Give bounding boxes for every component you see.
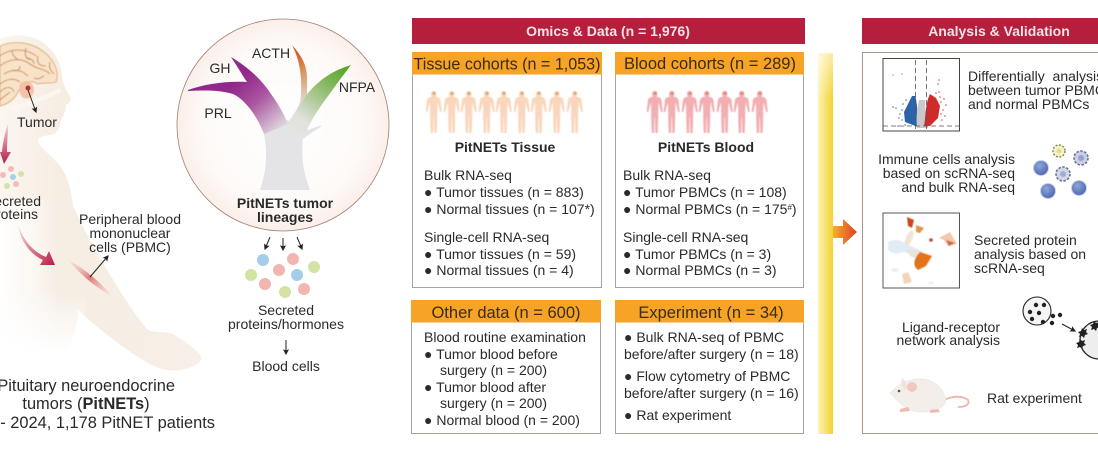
icon: ligand-receptor <box>1023 297 1098 359</box>
arrow to blood cells <box>285 340 287 354</box>
secreted proteins/hormones label: Secreted <box>258 302 314 318</box>
experiment list: before/after surgery (n = 18) <box>624 346 799 362</box>
experiment list: ● Bulk RNA-seq of PBMC <box>624 329 784 345</box>
ligand-receptor description: Ligand-receptor <box>902 319 1000 335</box>
blood cells label: Blood cells <box>252 358 320 374</box>
secreted protein description: scRNA-seq <box>974 260 1045 276</box>
panel: other data <box>411 300 601 434</box>
PBMC label <box>79 211 181 255</box>
header: analysis and validation <box>862 18 1098 44</box>
lineage labels <box>204 45 376 121</box>
arrow: tumor to secreted proteins <box>0 124 11 164</box>
secreted proteins label <box>0 193 41 222</box>
cohort title: - 2024, 1,178 PitNET patients <box>0 414 215 432</box>
blood bulk list: ) <box>792 201 797 217</box>
experiment list <box>624 329 799 423</box>
panel: blood cohorts <box>615 52 804 288</box>
blood subtitle: PitNETs Blood <box>658 139 754 155</box>
PBMC blood vessel <box>68 260 112 296</box>
immune cells description <box>878 151 1015 195</box>
panel: analysis and validation <box>862 52 1098 434</box>
tissue bulk list: Bulk RNA-seq <box>424 167 512 183</box>
immune cells description: Immune cells analysis <box>878 151 1015 167</box>
circle caption: lineages <box>257 209 313 225</box>
blood people icons <box>647 91 768 133</box>
other data list: surgery (n = 200) <box>440 362 547 378</box>
blood single-cell list <box>623 229 777 278</box>
volcano description <box>968 68 1098 112</box>
secreted protein dots <box>245 253 320 298</box>
other data list: surgery (n = 200) <box>440 395 547 411</box>
white band under brain <box>10 88 61 111</box>
yellow bar <box>818 53 833 434</box>
human silhouette with brain and tumor <box>0 36 202 371</box>
blood single-cell list: Single-cell RNA-seq <box>623 229 748 245</box>
volcano description: and normal PBMCs <box>968 96 1089 112</box>
icon: rat <box>890 378 969 413</box>
tumor label: Tumor <box>17 114 57 130</box>
tissue single-cell list: ● Tumor tissues (n = 59) <box>424 246 576 262</box>
volcano plot <box>883 58 960 131</box>
blood bulk list <box>623 167 797 217</box>
tissue bulk list: ● Tumor tissues (n = 883) <box>424 184 584 200</box>
other data list: ● Tumor blood before <box>424 346 558 362</box>
immune cells description: based on scRNA-seq <box>883 165 1015 181</box>
blood bulk list: ● Normal PBMCs (n = 175 <box>623 201 787 217</box>
brain <box>0 43 57 106</box>
panel: experiment <box>615 300 804 434</box>
tissue single-cell list: ● Normal tissues (n = 4) <box>424 262 574 278</box>
PBMC label: Peripheral blood <box>79 211 181 227</box>
lineage tree trunk <box>260 120 322 190</box>
other data heading: Other data (n = 600) <box>431 304 581 322</box>
circle caption <box>237 195 334 225</box>
tissue people icons <box>426 91 583 133</box>
tissue subtitle: PitNETs Tissue <box>455 139 556 155</box>
blood bulk list: # <box>787 203 792 212</box>
lineage labels: GH <box>210 60 230 76</box>
arrow: data to analysis <box>833 219 857 245</box>
circle caption: PitNETs tumor <box>237 195 334 211</box>
tissue single-cell list: Single-cell RNA-seq <box>424 229 549 245</box>
blood heading: Blood cohorts (n = 289) <box>624 55 796 73</box>
tumor arrow <box>28 90 36 112</box>
icon: immune cells <box>1034 145 1088 198</box>
PBMC label: cells (PBMC) <box>89 239 171 255</box>
secreted protein description: analysis based on <box>974 246 1086 262</box>
PBMC arrow <box>90 256 108 277</box>
header: analysis and validation: Analysis & Validation <box>928 23 1070 39</box>
secreted protein description <box>974 232 1086 276</box>
secreted proteins/hormones label: proteins/hormones <box>228 316 344 332</box>
ligand-receptor description <box>896 319 1000 348</box>
immune cells description: and bulk RNA-seq <box>901 179 1015 195</box>
cohort title <box>0 377 215 432</box>
PRL and GH branch <box>188 57 288 134</box>
blood single-cell list: ● Tumor PBMCs (n = 3) <box>623 246 771 262</box>
other data list: ● Normal blood (n = 200) <box>424 412 580 428</box>
header: omics and data <box>412 18 805 44</box>
other data list: ● Tumor blood after <box>424 379 546 395</box>
cohort title: Pituitary neuroendocrine <box>0 377 175 395</box>
panel: tissue cohorts <box>412 52 602 288</box>
secreted protein UMAP <box>883 213 960 288</box>
blood bulk list: Bulk RNA-seq <box>623 167 711 183</box>
fade of lower torso <box>0 290 85 352</box>
arrow: proteins to blood <box>18 225 55 265</box>
experiment list: ● Rat experiment <box>624 407 731 423</box>
body silhouette <box>0 36 202 371</box>
lineage labels: NFPA <box>339 79 376 95</box>
tissue heading: Tissue cohorts (n = 1,053) <box>414 56 600 74</box>
lineage labels: ACTH <box>252 45 290 61</box>
tissue single-cell list <box>424 229 576 278</box>
ligand-receptor description: network analysis <box>896 332 1000 348</box>
rat description: Rat experiment <box>987 390 1082 406</box>
ACTH branch <box>287 45 307 124</box>
tissue bulk list <box>424 167 595 217</box>
other data list: Blood routine examination <box>424 329 586 345</box>
blood single-cell list: ● Normal PBMCs (n = 3) <box>623 262 777 278</box>
secreted proteins/hormones label <box>228 302 344 332</box>
blood bulk list: ● Tumor PBMCs (n = 108) <box>623 184 787 200</box>
tumor dot <box>26 86 30 90</box>
NFPA branch <box>287 65 351 134</box>
fade of left torso <box>0 200 60 352</box>
PBMC label: mononuclear <box>90 225 171 241</box>
experiment list: ● Flow cytometry of PBMC <box>624 368 790 384</box>
arrows from circle <box>265 237 302 250</box>
circle: PitNETs tumor lineages <box>177 19 389 231</box>
header: omics and data: Omics & Data (n = 1,976) <box>526 23 690 39</box>
lineage labels: PRL <box>204 105 232 121</box>
small secreted protein dots <box>0 166 24 189</box>
experiment list: before/after surgery (n = 16) <box>624 385 799 401</box>
secreted protein description: Secreted protein <box>974 232 1077 248</box>
cohort title: tumors (PitNETs) <box>22 395 150 413</box>
experiment heading: Experiment (n = 34) <box>638 304 784 322</box>
tissue bulk list: ● Normal tissues (n = 107*) <box>424 201 595 217</box>
other data list <box>424 329 586 428</box>
